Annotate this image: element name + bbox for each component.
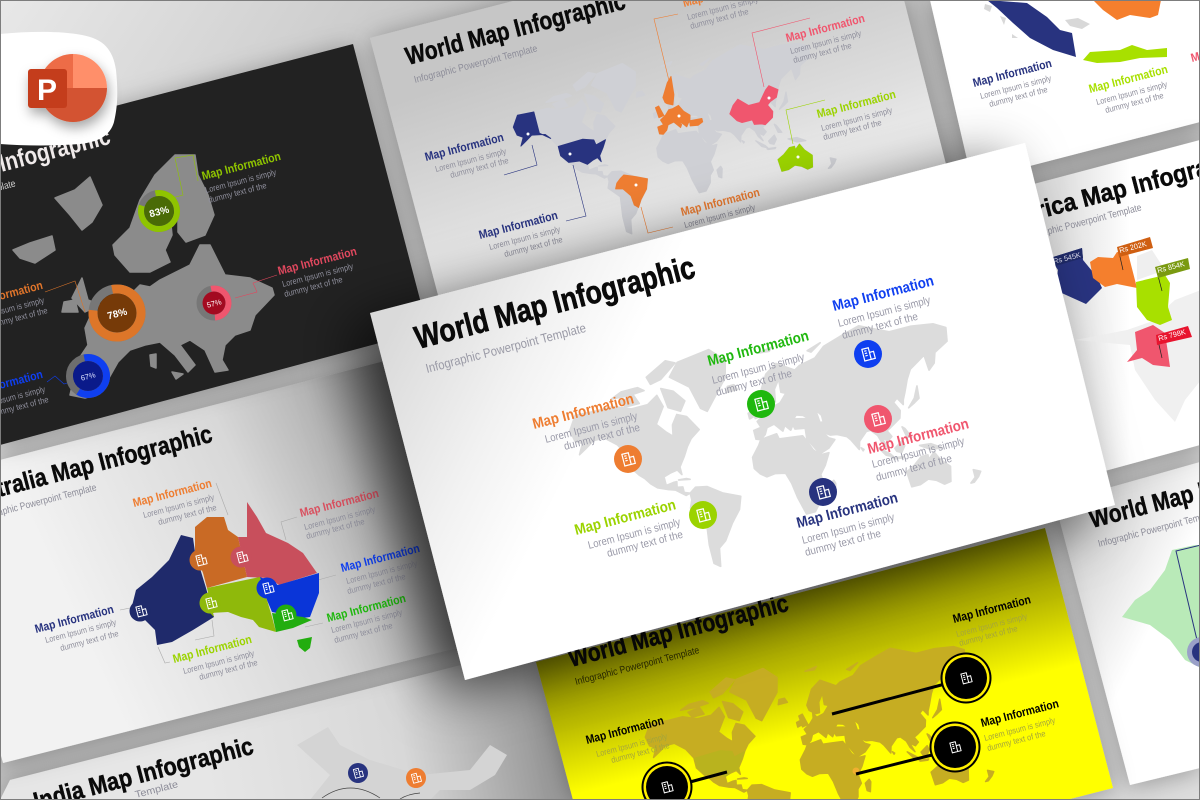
yellow slide kenya highlight: [852, 768, 860, 774]
callout: dark orange: [0, 278, 49, 330]
indonesia lime region: [1083, 45, 1167, 63]
callout: australia red: Map Information: [298, 486, 380, 520]
panel: australia map slide: [0, 357, 480, 763]
africa navy region: [1050, 248, 1102, 304]
callout: main orange: Map Information: [531, 390, 636, 433]
callout: indonesia lime: Map Information: [1087, 62, 1169, 96]
callout: main orange: Lorem Ipsum is simply: [544, 410, 639, 446]
callout: top lime australia: dummy text of the: [822, 117, 883, 142]
north america map: [1122, 545, 1200, 668]
callout: australia navy: [33, 602, 120, 653]
australia map regions: [131, 502, 319, 652]
callout: australia lime: [171, 632, 259, 682]
callout: main green: [706, 327, 811, 399]
icon: india orange marker: [406, 768, 426, 788]
callout: main blue: [831, 272, 936, 342]
ring chart: 83 percent: 83%: [148, 205, 171, 220]
callout: dark red: Lorem Ipsum is simply: [281, 261, 355, 289]
flag: 854K: Rs 854K: [1156, 259, 1186, 275]
australia icons: [130, 546, 296, 626]
callout: indonesia lime: Lorem Ipsum is simply: [1095, 79, 1169, 107]
callout: yellow top: dummy text of the: [958, 623, 1019, 648]
callout: yellow right: [979, 696, 1060, 753]
callout: dark lime: Map Information: [200, 149, 282, 183]
callout: top navy alaska: dummy text of the: [449, 155, 510, 180]
callout: top navy usa: dummy text of the: [503, 234, 564, 259]
icon: powerpoint disc: [28, 54, 107, 122]
ring chart: 78 percent: 78%: [106, 307, 129, 322]
callout: yellow right: dummy text of the: [986, 728, 1047, 753]
panel: world map slide top: [370, 0, 950, 310]
callout: australia blue: [339, 541, 421, 596]
callout: australia navy: dummy text of the: [59, 628, 120, 653]
panel: dark europe slide: [0, 44, 428, 445]
callout: top navy alaska: [423, 130, 510, 180]
callout: indonesia lime: dummy text of the: [1104, 90, 1165, 115]
callout: australia green: Lorem Ipsum is simply: [330, 607, 404, 635]
india arcs: [322, 788, 420, 799]
callout: australia navy: Lorem Ipsum is simply: [44, 617, 118, 645]
africa orange region: [1090, 252, 1137, 288]
panel: indonesia map slide: [930, 0, 1200, 181]
callout: top orange europe: dummy text of the: [689, 6, 750, 31]
europe map: [13, 155, 274, 398]
callout: indonesia navy: dummy text of the: [988, 84, 1049, 109]
callout: dark blue: [0, 367, 50, 419]
callout: main orange: [531, 390, 641, 453]
dark leader lines: [45, 155, 277, 384]
africa gray map: [1075, 290, 1200, 422]
callout: main lime: dummy text of the: [606, 529, 684, 560]
flag: 854K: [1155, 258, 1190, 291]
highlighted countries: [511, 46, 815, 238]
callout: australia green: dummy text of the: [333, 620, 394, 645]
panel: yellow world map slide: [536, 528, 1113, 800]
leader lines: [504, 14, 825, 233]
badge: powerpoint logo: [0, 32, 117, 146]
callout: yellow left: dummy text of the: [610, 740, 671, 765]
callout: australia lime: Map Information: [171, 632, 253, 666]
ring chart: 78 percent: [89, 285, 145, 341]
india map: [297, 727, 507, 800]
callout: top orange brazil: Lorem Ipsum is simply: [683, 202, 757, 230]
callout: top navy usa: Lorem Ipsum is simply: [488, 224, 562, 252]
callout: australia lime: Lorem Ipsum is simply: [182, 648, 256, 676]
callout: main green: Lorem Ipsum is simply: [711, 351, 806, 387]
africa gray north: [1137, 250, 1165, 280]
callout: top lime australia: Map Information: [815, 87, 897, 121]
icon: main lime marker: [689, 501, 717, 529]
callout: main red: Map Information: [866, 415, 971, 458]
callout: dark red: Map Information: [276, 244, 358, 278]
callout: indonesia navy: [971, 56, 1053, 109]
ring chart: 67 percent: 67%: [80, 370, 97, 383]
africa subtitle: Infographic Powerpoint Template: [1021, 202, 1143, 244]
ring chart: 67 percent: [67, 355, 109, 397]
callout: top navy alaska: Lorem Ipsum is simply: [434, 146, 508, 174]
callout: australia lime: dummy text of the: [198, 657, 259, 682]
callout: australia green: Map Information: [325, 591, 407, 625]
callout: main red: [866, 415, 971, 484]
callout: yellow left: [584, 713, 671, 765]
callout: australia orange: Map Information: [131, 476, 213, 510]
ring chart: 57 percent: [197, 286, 231, 320]
indonesia navy region: [987, 0, 1076, 57]
callout: dark lime: [200, 149, 282, 205]
icon: main navy marker: [809, 478, 837, 506]
callout: australia orange: dummy text of the: [157, 502, 218, 527]
callout: main blue: Lorem Ipsum is simply: [837, 294, 932, 330]
icon: main blue marker: [854, 340, 882, 368]
callout: main navy: Map Information: [795, 489, 900, 532]
callout: main lime: [573, 496, 684, 560]
callout: main red: dummy text of the: [875, 453, 953, 484]
callout: main navy: Lorem Ipsum is simply: [801, 511, 896, 547]
north america marker: [1187, 637, 1200, 667]
callout: australia orange: Lorem Ipsum is simply: [142, 492, 216, 520]
marker: top: [940, 652, 992, 704]
callout: main blue: Map Information: [831, 272, 936, 315]
pins: [526, 96, 800, 186]
callout: top red china: [784, 11, 866, 65]
callout: australia orange: [131, 476, 218, 527]
connector lines: [690, 684, 945, 782]
top slide subtitle: Infographic Powerpoint Template: [413, 43, 539, 86]
callout: top navy alaska: Map Information: [423, 130, 505, 164]
callout: australia blue: dummy text of the: [346, 571, 407, 596]
callout: australia green: [325, 591, 407, 645]
callout: main orange: dummy text of the: [563, 422, 641, 453]
marker: right: [930, 722, 980, 772]
panel: india map slide: [0, 645, 576, 800]
yellow slide world map: [636, 618, 1001, 800]
main title: World Map Infographic: [411, 249, 699, 356]
callout: main green: dummy text of the: [715, 368, 793, 399]
indonesia gray islands: [984, 4, 1090, 38]
callout: main lime: Map Information: [573, 496, 678, 539]
marker: left: [642, 762, 692, 800]
callout: top orange brazil: [679, 185, 761, 230]
panel: africa map slide: [1000, 140, 1200, 475]
icon: powerpoint letter: P: [37, 74, 57, 107]
callout: dark lime: dummy text of the: [207, 180, 268, 205]
africa red region: [1127, 325, 1170, 367]
callout: dark lime: Lorem Ipsum is simply: [204, 167, 278, 195]
callout: top red china: Map Information: [784, 11, 866, 45]
callout: main red: Lorem Ipsum is simply: [871, 435, 966, 471]
icon: india navy marker: [348, 763, 368, 783]
callout: top red china: dummy text of the: [792, 40, 853, 65]
callout: australia red: dummy text of the: [305, 516, 366, 541]
ring chart: 83 percent: [138, 190, 180, 232]
callout: dark red: [276, 244, 358, 299]
callout: top navy usa: [477, 208, 564, 259]
north america leader line: [1176, 545, 1200, 640]
flag: 798K: [1156, 326, 1192, 358]
flag: 202K: [1117, 237, 1153, 270]
callout: yellow right: Lorem Ipsum is simply: [983, 715, 1057, 743]
yellow slide usa highlight: [694, 744, 750, 785]
callout: top lime australia: Lorem Ipsum is simply: [820, 105, 894, 133]
callout: yellow top: Lorem Ipsum is simply: [955, 611, 1029, 639]
icon: main green marker: [747, 390, 775, 418]
ring chart: 57 percent: 57%: [206, 297, 223, 310]
callout: main navy: [795, 489, 900, 559]
australia leader lines: [120, 483, 336, 663]
callout: indonesia navy: Lorem Ipsum is simply: [979, 73, 1053, 101]
callout: australia red: [298, 486, 380, 541]
callout: yellow top: Map Information: [951, 592, 1032, 626]
icon: main orange marker: [614, 445, 642, 473]
callout: indonesia navy: Map Information: [971, 56, 1053, 90]
main subtitle: Infographic Powerpoint Template: [424, 320, 587, 376]
callout: yellow right: Map Information: [979, 696, 1060, 730]
callout: australia blue: Lorem Ipsum is simply: [345, 558, 419, 586]
yellow slide subtitle: Infographic Powerpoint Template: [574, 645, 701, 688]
callout: main green: Map Information: [706, 327, 811, 370]
indonesia orange region: [1093, 0, 1161, 20]
flag: 202K: Rs 202K: [1118, 239, 1148, 255]
callout: main navy: dummy text of the: [804, 528, 882, 559]
callout: yellow left: Map Information: [584, 713, 665, 747]
callout: australia navy: Map Information: [33, 602, 115, 636]
callout: indonesia lime: [1087, 62, 1169, 115]
callout: top navy usa: Map Information: [477, 208, 559, 242]
icon: main red marker: [864, 405, 892, 433]
flag: 798K: Rs 798K: [1157, 327, 1187, 343]
callout: main lime: Lorem Ipsum is simply: [587, 516, 682, 552]
world map gray: [505, 17, 843, 256]
callout: main blue: dummy text of the: [841, 311, 919, 342]
africa lime region: [1136, 275, 1172, 325]
callout: top orange brazil: Map Information: [679, 185, 761, 219]
panel: main world map slide: [370, 143, 1115, 680]
callout: yellow top: [951, 592, 1032, 648]
callout: dark red: dummy text of the: [283, 274, 344, 299]
panel: north america slide: [1055, 450, 1200, 785]
callout: yellow left: Lorem Ipsum is simply: [595, 731, 669, 759]
callout: top red china: Lorem Ipsum is simply: [789, 28, 863, 56]
flag: 545K: Rs 545K: [1052, 250, 1082, 266]
yellow slide title: World Map Infographic: [565, 589, 791, 673]
callout: top lime australia: [815, 87, 897, 142]
callout: australia red: Lorem Ipsum is simply: [303, 504, 377, 532]
callout: australia blue: Map Information: [339, 541, 421, 575]
main world map: [559, 291, 990, 594]
